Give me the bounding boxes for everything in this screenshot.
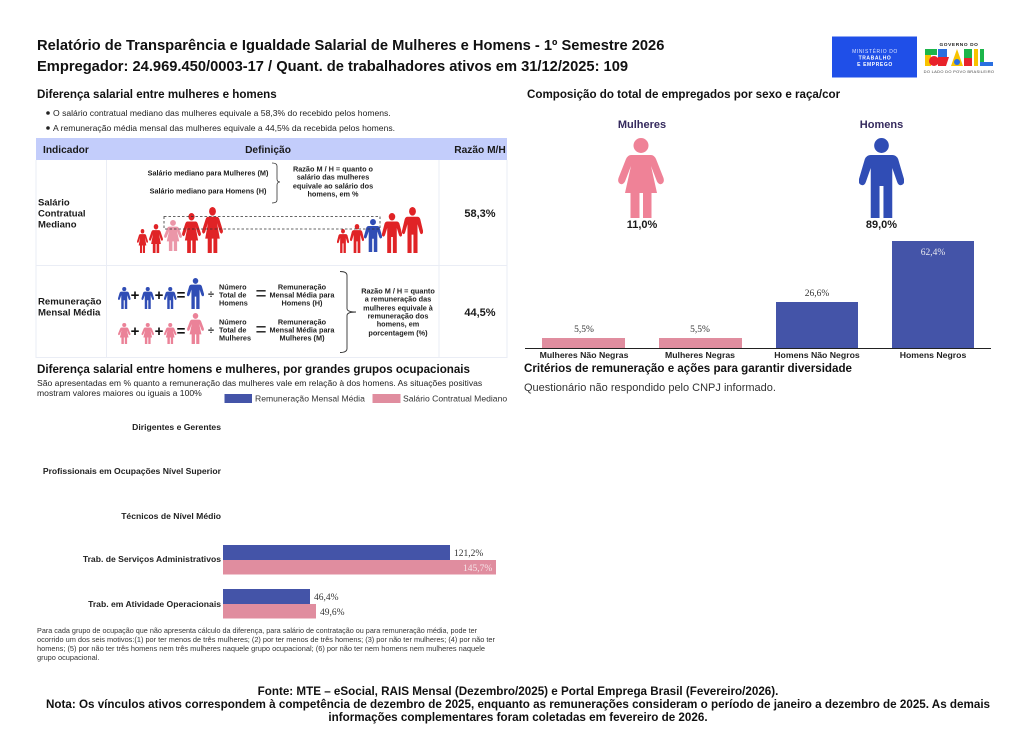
legend: Remuneração Mensal Média: [255, 394, 365, 404]
formula: women: +: [131, 323, 140, 340]
text block: chart intro: São apresentadas em % quanto a remuneração das mulheres vale em relação à dos homens. As situações positivas: [37, 378, 482, 388]
logo: Governo do Brasil: DO LADO DO POVO BRASILEIRO: [924, 69, 994, 74]
pictogram: homens 89,0%: 89,0%: [866, 219, 897, 231]
footer: source and note: Nota: Os vínculos ativos correspondem à competência de dezembro de 2025, enquanto as remunerações consideram o período de janeiro a dezembro de 2025. As demais: [46, 698, 990, 711]
bar chart: sexo e raça/cor: Homens Negros: [900, 350, 966, 360]
text block: key findings: O salário contratual mediano das mulheres equivale a 58,3% do recebido pelos homens.: [53, 108, 391, 118]
footer: source and note: [46, 685, 990, 724]
text block: footnote: ocorrido um dos seis motivos:(1) por ter menos de três mulheres; (2) por ter menos de três homens; (3) por não ter mulheres; (4) por não ter: [37, 635, 496, 644]
bar chart: grupos ocupacionais: Dirigentes e Gerentes: [132, 422, 221, 432]
text block: key findings: [46, 108, 395, 133]
formula: women: [118, 313, 335, 344]
bar chart: sexo e raça/cor: 26,6%: [805, 289, 829, 299]
row definition: median text and bracket: Razão M / H = quanto o: [293, 164, 374, 174]
value: 44,5%: 44,5%: [464, 307, 496, 319]
bar chart: sexo e raça/cor: 62,4%: [921, 248, 945, 258]
text block: key findings: A remuneração média mensal das mulheres equivale a 44,5% da recebida pelos homens.: [53, 123, 395, 133]
table header: Razão M/H: [454, 145, 506, 156]
pictogram: homens 89,0%: Homens: [860, 119, 903, 131]
bracket and ratio note: mulheres equivale à: [363, 304, 434, 312]
logo: Ministério do Trabalho e Emprego: MINISTÉRIO DO: [852, 48, 898, 55]
bar chart: sexo e raça/cor: 5,5%: [574, 325, 594, 335]
bar chart: grupos ocupacionais: Técnicos de Nível Médio: [121, 511, 221, 521]
formula: men: Remuneração: [278, 282, 327, 292]
bracket and ratio note: a remuneração das: [365, 294, 431, 304]
heading: critérios: Critérios de remuneração e ações para garantir diversidade: [524, 362, 853, 375]
formula: women: Mulheres: [219, 334, 251, 342]
formula: men: =: [255, 284, 267, 305]
footer: source and note: informações complementares foram coletadas em fevereiro de 2026.: [328, 711, 708, 724]
title: [37, 38, 664, 75]
row definition: median text and bracket: Salário mediano para Mulheres (M): [148, 168, 269, 178]
median diagram: men figures: [337, 207, 423, 253]
heading: diferença salarial: Diferença salarial entre mulheres e homens: [37, 88, 277, 101]
formula: women: Total de: [219, 326, 246, 334]
bar chart: grupos ocupacionais: Trab. de Serviços Administrativos: [83, 554, 221, 564]
pictogram: mulheres 11,0%: 11,0%: [627, 219, 658, 231]
formula: men: =: [177, 287, 186, 304]
bracket and ratio note: homens, em: [377, 320, 420, 328]
bar chart: sexo e raça/cor: Mulheres Não Negras: [540, 350, 629, 360]
bracket and ratio note: [340, 272, 435, 352]
table header: [43, 145, 506, 156]
formula: men: Homens (H): [282, 298, 323, 308]
formula: men: Total de: [219, 290, 246, 300]
legend: Salário Contratual Mediano: [403, 394, 507, 404]
pictogram: homens 89,0%: [859, 119, 904, 231]
value: 58,3%: 58,3%: [464, 208, 496, 220]
formula: women: =: [177, 323, 186, 340]
logo: Governo do Brasil: [924, 42, 994, 74]
row definition: median text and bracket: salário das mulheres: [297, 172, 369, 182]
formula: women: Mensal Média para: [270, 326, 335, 334]
title: Empregador: 24.969.450/0003-17 / Quant. de trabalhadores ativos em 31/12/2025: 109: [37, 59, 628, 75]
row label: salário contratual mediano: [38, 198, 86, 230]
formula: men: [118, 278, 335, 309]
row label: remuneração mensal média: [38, 296, 102, 318]
logo: Ministério do Trabalho e Emprego: TRABALHO: [859, 56, 891, 62]
title: Relatório de Transparência e Igualdade Salarial de Mulheres e Homens - 1º Semestre 2026: [37, 38, 664, 54]
median diagram: dashed guides: [164, 216, 380, 229]
bar chart: grupos ocupacionais: 145,7%: [463, 564, 492, 574]
bar chart: grupos ocupacionais: [43, 422, 496, 618]
bar chart: grupos ocupacionais: Profissionais em Ocupações Nível Superior: [43, 466, 222, 476]
formula: women: =: [255, 320, 267, 341]
heading: grupos ocupacionais: Diferença salarial entre homens e mulheres, por grandes grupos ocupacionais: [37, 363, 470, 376]
bracket and ratio note: Razão M / H = quanto: [361, 286, 435, 296]
row label: salário contratual mediano: Mediano: [38, 220, 77, 230]
logo: Ministério do Trabalho e Emprego: E EMPREGO: [857, 62, 893, 68]
pictogram: mulheres 11,0%: [618, 119, 666, 231]
logo: Ministério do Trabalho e Emprego: [832, 36, 917, 78]
pictogram: mulheres 11,0%: Mulheres: [618, 119, 666, 131]
bar chart: grupos ocupacionais: 49,6%: [320, 608, 345, 618]
formula: men: Número: [219, 282, 247, 292]
bar chart: grupos ocupacionais: 46,4%: [314, 593, 339, 603]
row definition: median text and bracket: equivale ao salário dos: [293, 182, 373, 190]
bar chart: sexo e raça/cor: Homens Não Negros: [774, 350, 860, 360]
row label: remuneração mensal média: Mensal Média: [38, 308, 101, 318]
text block: footnote: [37, 626, 496, 662]
median diagram: women figures: [137, 207, 223, 253]
text block: chart intro: [37, 378, 482, 398]
row definition: median text and bracket: [148, 163, 374, 203]
bar chart: grupos ocupacionais: 121,2%: [454, 549, 483, 559]
formula: men: +: [131, 287, 140, 304]
formula: men: Mensal Média para: [270, 290, 335, 300]
text block: footnote: Para cada grupo de ocupação que não apresenta cálculo da diferença, para salário de contratação ou para remuneração média, pode ter: [37, 626, 478, 635]
bar chart: sexo e raça/cor: Mulheres Negras: [665, 350, 735, 360]
text block: critérios: Questionário não respondido pelo CNPJ informado.: [524, 382, 776, 394]
text block: footnote: homens; (5) por não ter três homens nem três mulheres naquele grupo ocupacional; (6) por não ter nem homens nem mulheres naquele: [37, 644, 485, 653]
footer: source and note: Fonte: MTE – eSocial, RAIS Mensal (Dezembro/2025) e Portal Emprega Brasil (Fevereiro/2026).: [258, 685, 778, 698]
bar chart: sexo e raça/cor: [525, 241, 991, 360]
row definition: median text and bracket: Salário mediano para Homens (H): [150, 186, 267, 196]
table header: Indicador: [43, 145, 89, 156]
formula: women: ÷: [208, 325, 214, 337]
text block: chart intro: mostram valores maiores ou iguais a 100%: [37, 388, 202, 398]
formula: women: Mulheres (M): [280, 334, 325, 342]
bar chart: grupos ocupacionais: Trab. em Atividade Operacionais: [88, 599, 221, 609]
text block: footnote: grupo ocupacional.: [37, 653, 99, 662]
formula: women: +: [155, 323, 164, 340]
bracket and ratio note: porcentagem (%): [368, 328, 428, 338]
heading: composição: Composição do total de empregados por sexo e raça/cor: [527, 88, 841, 101]
row label: salário contratual mediano: Contratual: [38, 208, 86, 220]
table header: Definição: [245, 145, 291, 156]
legend: [224, 394, 507, 404]
formula: men: +: [155, 287, 164, 304]
formula: men: Homens: [219, 298, 248, 308]
formula: men: ÷: [208, 289, 214, 301]
formula: women: Remuneração: [278, 318, 327, 326]
row definition: median text and bracket: homens, em %: [307, 190, 359, 198]
bar chart: sexo e raça/cor: 5,5%: [690, 325, 710, 335]
row label: remuneração mensal média: Remuneração: [38, 296, 102, 308]
formula: women: Número: [219, 318, 247, 326]
row label: salário contratual mediano: Salário: [38, 198, 70, 208]
logo: Governo do Brasil: GOVERNO DO: [939, 42, 979, 48]
bracket and ratio note: remuneração dos: [368, 312, 428, 320]
panel: indicator table: [36, 138, 507, 358]
